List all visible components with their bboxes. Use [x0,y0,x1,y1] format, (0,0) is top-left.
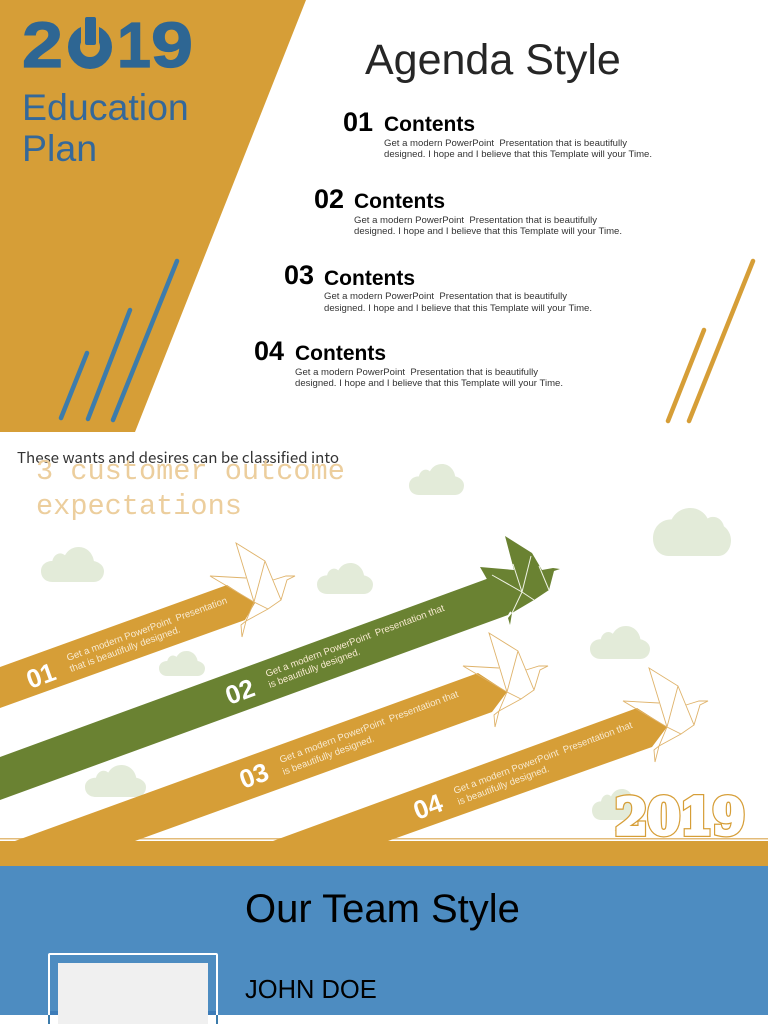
year title with power icon: 9 [151,9,193,81]
agenda item 02: 02 [314,184,344,214]
blue diagonal accent lines [61,261,177,420]
agenda item 04: Get a modern PowerPoint Presentation that is beautifully [295,367,538,378]
year title with power icon: 1 [117,9,151,81]
agenda item 04: 04 [254,336,284,366]
arrow 02: is beautifully designed. [267,647,362,691]
panel subtitle: Education [22,86,189,128]
gold diagonal accent lines [668,261,753,421]
clouds [41,464,731,820]
panel subtitle [22,86,189,169]
origami bird outline 1 [210,543,295,637]
panel subtitle: Plan [22,127,97,169]
agenda item 03: Contents [324,267,415,290]
arrow 03: 03 [235,757,273,795]
agenda item 04: designed. I hope and I believe that this Template will your Time. [295,378,563,389]
agenda item 02: Get a modern PowerPoint Presentation that is beautifully [354,215,597,226]
agenda item 03: 03 [284,260,314,290]
ground line [0,838,768,840]
agenda item 03 [284,260,592,314]
team panel [0,866,768,1015]
intro sentence: These wants and desires can be classified into [17,447,339,468]
outlined 2019: 2019 [615,787,745,846]
team member name: JOHN DOE [245,976,377,1004]
origami bird outline 3 [463,633,548,727]
team photo frame [48,954,218,1024]
top-left gold panel [0,0,306,432]
arrow 03 [15,673,507,841]
arrow 02: 02 [221,673,259,711]
agenda item 01: 01 [343,107,373,137]
arrow 03: is beautifully designed. [281,734,376,778]
year title with power icon: 2 [22,9,63,81]
arrow 04 [273,708,667,841]
outcome heading: 3 customer outcome [36,455,345,488]
agenda item 03: designed. I hope and I believe that this Template will your Time. [324,303,592,314]
outcome heading [36,455,345,523]
arrow 04: Get a modern PowerPoint Presentation that [452,720,634,797]
gold ground band [0,841,768,866]
arrow 01: Get a modern PowerPoint Presentation [65,595,229,664]
arrow 02: Get a modern PowerPoint Presentation that [264,603,446,680]
arrow 01: that is beautifully designed. [68,624,182,675]
agenda item 01: Get a modern PowerPoint Presentation that is beautifully [384,138,627,149]
arrow 03: Get a modern PowerPoint Presentation that [278,689,460,766]
agenda item 02: Contents [354,190,445,213]
arrow 02 [0,577,522,800]
arrow 04: 04 [409,787,447,826]
agenda item 04: Contents [295,342,386,365]
agenda item 01: designed. I hope and I believe that this Template will your Time. [384,149,652,160]
arrow 01 [0,585,255,708]
origami bird outline 4 [623,668,708,762]
agenda item 01: Contents [384,113,475,136]
arrow 04: is beautifully designed. [456,764,551,808]
arrow 01: 01 [22,657,60,695]
outcome heading: expectations [36,490,242,523]
agenda item 02: designed. I hope and I believe that this Template will your Time. [354,226,622,237]
agenda item 02 [314,184,622,237]
agenda item 01 [343,107,652,160]
agenda item 04 [254,336,563,389]
team heading: Our Team Style [245,887,520,931]
agenda heading: Agenda Style [365,36,621,84]
year title with power icon [22,9,193,81]
agenda item 03: Get a modern PowerPoint Presentation that is beautifully [324,291,567,302]
outlined 2019: 2019 [615,787,745,846]
origami bird solid green [480,536,560,625]
